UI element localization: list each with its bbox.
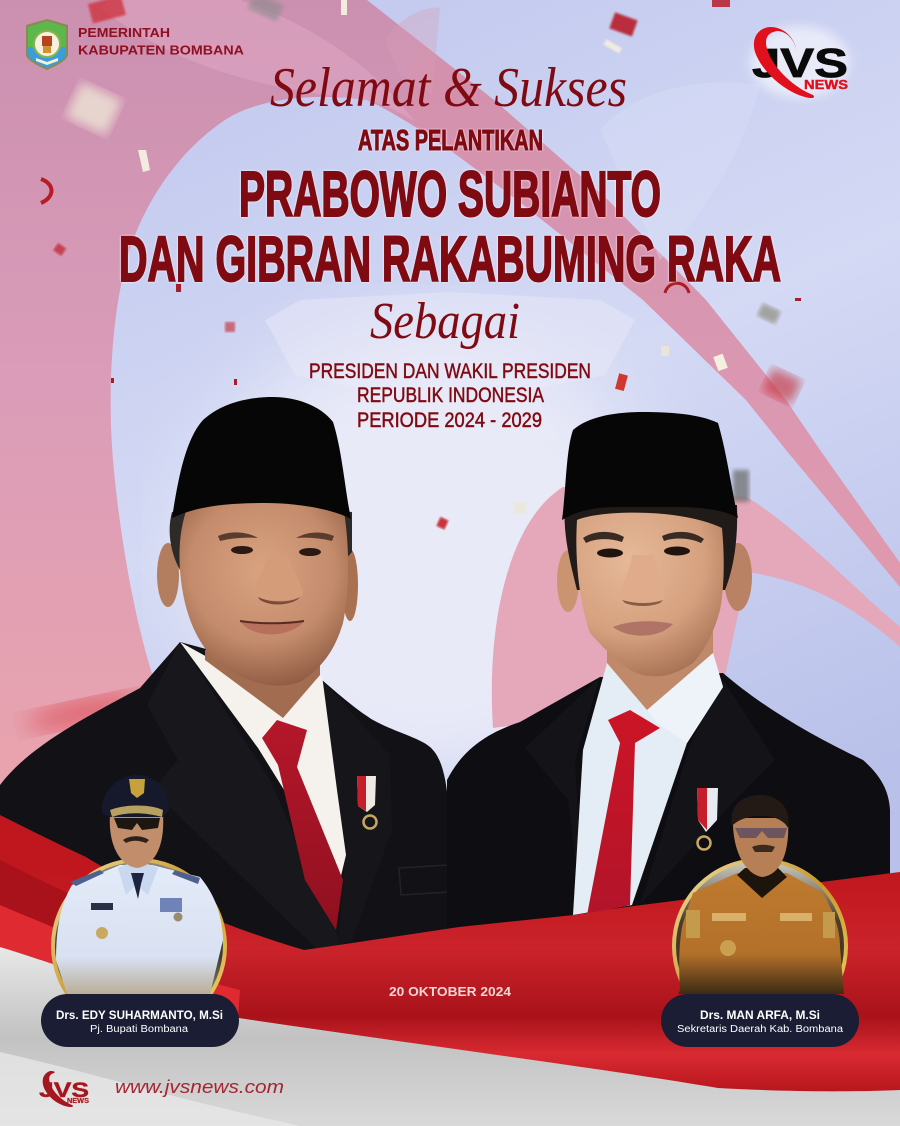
- date: 20 OKTOBER 2024: [389, 985, 511, 999]
- icon: shield emblem: [26, 19, 68, 70]
- ears: [157, 543, 179, 607]
- uniform: [678, 873, 844, 994]
- garuda wing left: [100, 0, 415, 122]
- name pill: Edy Suharmanto: Drs. EDY SUHARMANTO, M.Si: [56, 1008, 223, 1022]
- pink panel and ribbon: [0, 0, 900, 830]
- nose: [620, 555, 665, 602]
- header logo: Kabupaten Bombana: [26, 19, 244, 70]
- title block: PERIODE 2024 - 2029: [357, 408, 542, 432]
- sunglasses: [114, 818, 160, 830]
- name pill: Man Arfa: Drs. MAN ARFA, M.Si: [700, 1008, 820, 1022]
- brows: [218, 532, 334, 541]
- mouth: [240, 621, 304, 634]
- face: [110, 815, 163, 868]
- mouth: [613, 621, 673, 636]
- footer logo: JVS News: [39, 1071, 89, 1107]
- insignia: [129, 779, 145, 798]
- right pink crescent: [492, 487, 900, 728]
- face: [733, 818, 788, 877]
- face: [179, 500, 348, 686]
- title block: REPUBLIK INDONESIA: [357, 383, 545, 407]
- eyes: [597, 548, 623, 558]
- name pill: Edy Suharmanto: [41, 994, 239, 1047]
- ears: [557, 550, 579, 612]
- tie: [587, 710, 660, 915]
- suit: [0, 642, 453, 960]
- mustache: [752, 845, 775, 852]
- bright left red: [0, 905, 240, 1018]
- suit: [447, 673, 900, 960]
- medal pin: [357, 776, 376, 828]
- mustache: [123, 836, 149, 843]
- officer cap: [102, 775, 169, 817]
- neck: [205, 650, 320, 718]
- light lower wave: [0, 1052, 300, 1126]
- neck: [607, 625, 713, 710]
- garuda head: [385, 7, 440, 95]
- eyes: [231, 546, 253, 554]
- glasses: [735, 828, 787, 838]
- lapels: [147, 642, 342, 950]
- website url: www.jvsnews.com: [115, 1077, 284, 1097]
- necktie: [131, 873, 144, 899]
- confetti: [41, 0, 802, 530]
- brows: [583, 532, 704, 543]
- face: [576, 513, 724, 676]
- logo: JVS News top right: JVS: [752, 40, 848, 86]
- dark left fold: [0, 860, 180, 940]
- hair: [565, 505, 737, 590]
- name pill: Edy Suharmanto: Pj. Bupati Bombana: [90, 1024, 188, 1035]
- red glow left: [24, 688, 146, 736]
- title block: [119, 57, 781, 432]
- footer logo: JVS News: NEWS: [67, 1098, 89, 1105]
- heading: government name: PEMERINTAH: [78, 26, 170, 40]
- script greeting: Selamat & Sukses: [270, 57, 627, 119]
- subheading: ATAS PELANTIKAN: [358, 125, 543, 157]
- header logo: Kabupaten Bombana: KABUPATEN BOMBANA: [78, 44, 244, 58]
- portrait: Prabowo Subianto: [0, 397, 453, 960]
- pocket flap: [399, 865, 449, 895]
- red wave: [0, 815, 900, 1092]
- shirt collar: [737, 868, 787, 898]
- ribbon tone: [400, 42, 900, 587]
- portrait badge: Edy Suharmanto: [51, 775, 227, 1034]
- medal pin: [697, 788, 718, 850]
- medals and badges: [160, 898, 182, 912]
- gold ring: [672, 858, 848, 1034]
- hair: [731, 795, 789, 828]
- collar: [647, 653, 723, 743]
- office lines: PRESIDEN DAN WAKIL PRESIDEN: [309, 359, 591, 383]
- nose: [254, 555, 303, 600]
- epaulets: [70, 870, 200, 886]
- shirt: [180, 642, 346, 880]
- gold ring: [51, 858, 227, 1034]
- tie: [262, 720, 343, 930]
- badges: [712, 913, 746, 921]
- portrait badge: Man Arfa: [672, 795, 848, 1034]
- portrait: Gibran Rakabuming Raka: [447, 412, 900, 960]
- uniform: [56, 865, 223, 994]
- script connector: Sebagai: [370, 293, 520, 350]
- name pill: Man Arfa: Sekretaris Daerah Kab. Bombana: [677, 1024, 843, 1035]
- footer logo: JVS News: JVS: [39, 1079, 89, 1102]
- name pill: Man Arfa: [661, 994, 859, 1047]
- lapels: [525, 677, 775, 915]
- peci cap: [562, 412, 738, 520]
- bottom wave banner: [0, 815, 900, 1126]
- garuda body: [265, 292, 635, 452]
- logo: JVS News top right: NEWS: [804, 78, 848, 92]
- white wave: [0, 947, 900, 1126]
- collar: [118, 860, 158, 895]
- hair sides: [170, 510, 352, 570]
- garuda wing right: [600, 82, 760, 260]
- peci cap: [172, 397, 351, 519]
- logo: JVS News top right: [750, 26, 850, 98]
- shirt: [573, 653, 723, 915]
